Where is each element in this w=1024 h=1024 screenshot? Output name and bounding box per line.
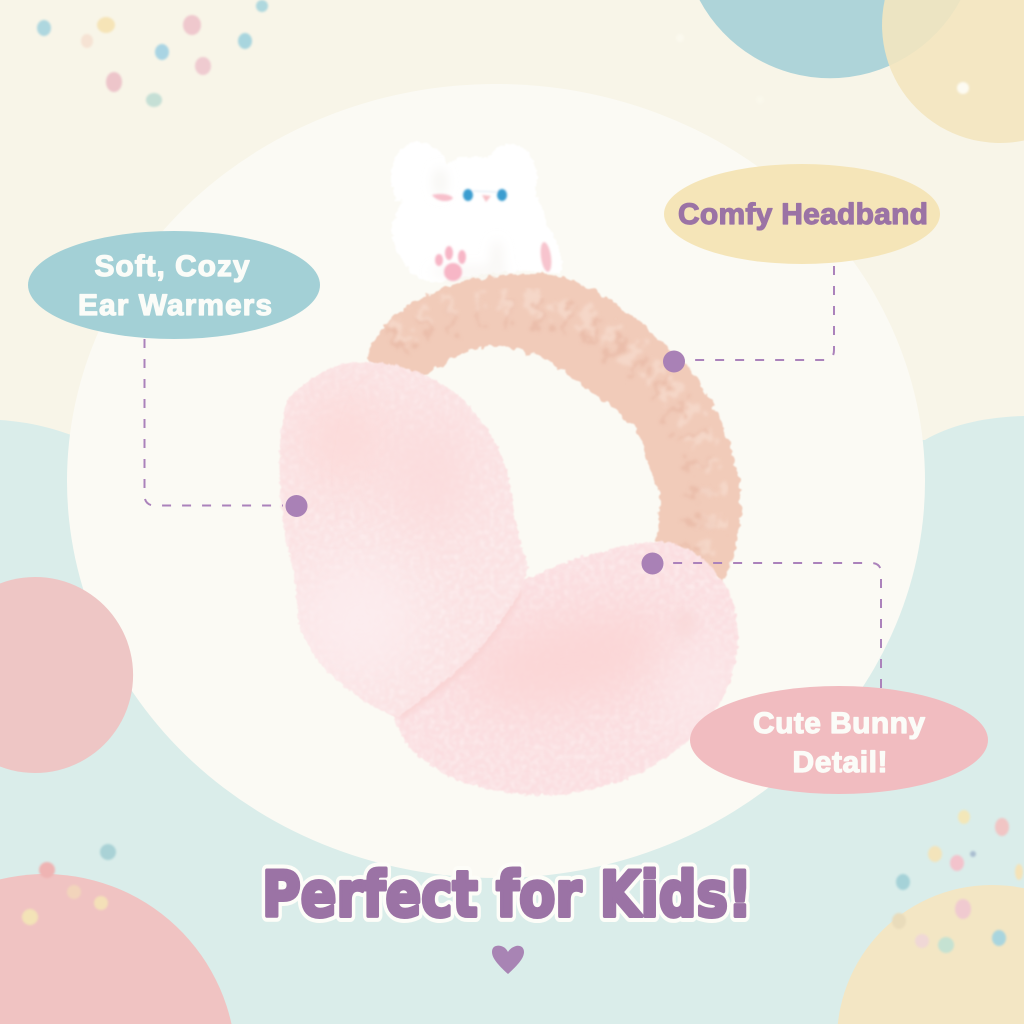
- connector: headband: [663, 266, 834, 372]
- confetti: bottom left: [22, 844, 116, 925]
- confetti: top left: [37, 0, 268, 107]
- title: Perfect for Kids!: [262, 858, 752, 931]
- icon: heart: [492, 946, 524, 974]
- left ear muff: [280, 362, 528, 718]
- callout: soft, cozy ear warmers: Soft, Cozy: [94, 250, 250, 283]
- headband: [367, 274, 740, 580]
- callout: cute bunny detail: [690, 686, 988, 794]
- callout: soft, cozy ear warmers: [28, 231, 320, 339]
- confetti: bottom right: [892, 810, 1023, 953]
- earmuffs illustration: [280, 143, 740, 795]
- connector: bunny detail: [642, 552, 881, 688]
- right ear muff: [380, 542, 738, 795]
- decorative circle: bottom right yellow: [838, 885, 1024, 1024]
- decorative circle: bottom left pink: [0, 874, 232, 1024]
- callout: comfy headband: [664, 164, 940, 264]
- callout: soft, cozy ear warmers: Ear Warmers: [78, 289, 272, 322]
- decorative circle: top right yellow: [882, 0, 1024, 143]
- connector: ear warmers: [144, 339, 308, 517]
- decorative circle: left pink: [0, 577, 133, 773]
- callout: cute bunny detail: Detail!: [792, 746, 888, 779]
- central cream circle: [67, 84, 925, 878]
- decorative sparkles: top right: [676, 34, 969, 104]
- bunny: [392, 143, 561, 282]
- callout: comfy headband: Comfy Headband: [678, 198, 928, 231]
- callout: cute bunny detail: Cute Bunny: [753, 707, 925, 740]
- decorative circle: top teal: [700, 0, 960, 78]
- title: Perfect for Kids!: [262, 858, 752, 931]
